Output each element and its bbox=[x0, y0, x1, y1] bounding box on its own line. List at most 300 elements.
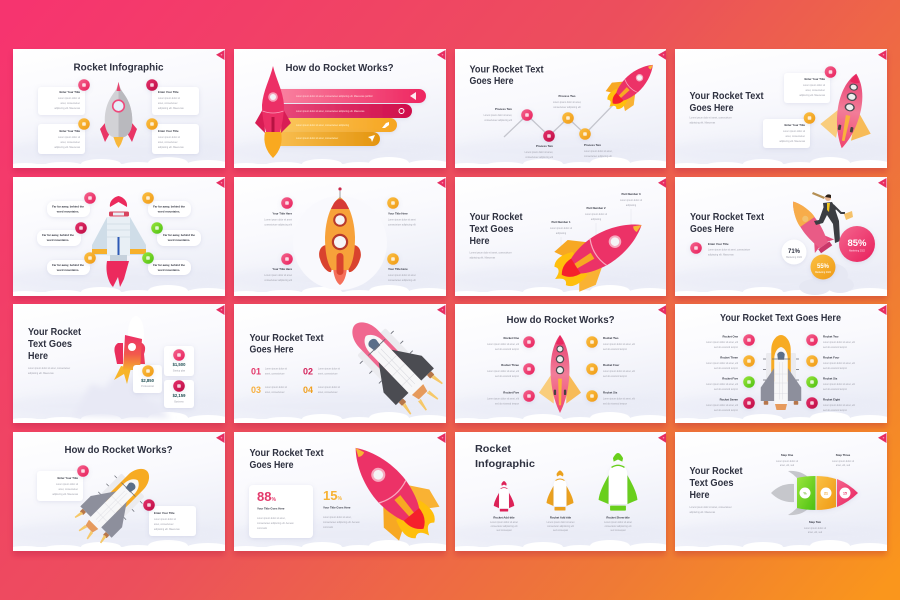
metric card 88 percent: commodo bbox=[257, 528, 268, 530]
pill bottom left: Far far away, behind the bbox=[52, 263, 84, 267]
metric 15 percent: Your Title Goes Here bbox=[323, 506, 351, 510]
text top left: consectetuer adipiscing elit bbox=[264, 224, 292, 226]
pill top right: Far far away, behind the bbox=[153, 204, 185, 208]
title: Here bbox=[470, 235, 490, 247]
body text bbox=[690, 506, 732, 514]
text 1: Lorem ipsum dolor sit amet, bbox=[484, 114, 512, 117]
title bbox=[28, 326, 81, 362]
metric 15 percent bbox=[323, 488, 360, 529]
part 3 label: adipiscing bbox=[626, 205, 637, 207]
panel: How do Rocket Works six labels bbox=[455, 304, 666, 423]
pill bottom right bbox=[148, 260, 191, 275]
value card 2159: $2,159 bbox=[173, 393, 186, 398]
text top left: Your Title Here bbox=[272, 212, 292, 216]
title bbox=[475, 443, 535, 470]
card 2 bbox=[763, 119, 810, 148]
text seven: Lorem ipsum dolor sit amet, elit bbox=[706, 404, 738, 407]
text five bbox=[706, 376, 738, 391]
body text: adipiscing elit. Maecenas bbox=[28, 372, 55, 375]
panel: process line chart with rocket bbox=[455, 49, 666, 168]
shuttle illustration bbox=[92, 196, 146, 287]
text four bbox=[603, 363, 635, 378]
text 1 bbox=[484, 107, 512, 122]
text one: sed do eiusmod tempor bbox=[714, 346, 738, 349]
medium orange rocket bbox=[546, 470, 574, 510]
line chart path bbox=[504, 103, 615, 137]
node 3 bbox=[562, 112, 574, 124]
rocket bbox=[599, 54, 664, 118]
text four: Rocket Four bbox=[823, 356, 840, 360]
value card 2850 bbox=[133, 365, 162, 393]
large green rocket bbox=[599, 453, 637, 511]
body text bbox=[470, 252, 512, 260]
node 1 bbox=[521, 109, 533, 121]
metric card 88 percent: Your Title Goes Here bbox=[257, 506, 285, 510]
panel: shuttle eight labels bbox=[675, 304, 887, 423]
text five bbox=[487, 390, 519, 406]
text 3: Process Two bbox=[558, 94, 576, 98]
icon: left pink bbox=[743, 334, 755, 346]
step one label: Lorem ipsum dolor sit bbox=[776, 460, 798, 463]
bar 4: Lorem ipsum dolor sit amet, consectetuer bbox=[296, 137, 338, 140]
step badge two: 21 bbox=[824, 491, 828, 495]
text one: Rocket One bbox=[722, 334, 738, 338]
item 03: amet, consectetuer bbox=[265, 391, 285, 394]
step three label: amet, elit, sed bbox=[836, 464, 851, 467]
businessman with telescope bbox=[812, 192, 853, 243]
panel: rocket with man and percentages bbox=[675, 177, 887, 296]
card right: amet, consectetuer bbox=[154, 523, 174, 526]
panel: rocket with two cards bbox=[675, 49, 887, 168]
icon: pink badge bbox=[173, 349, 185, 361]
card top left: Enter Your Title bbox=[59, 90, 80, 94]
text one: Lorem ipsum dolor sit amet, elit bbox=[487, 343, 519, 346]
bar 3: Lorem ipsum dolor sit amet, consectetuer adipiscing bbox=[296, 124, 350, 127]
card 2: adipiscing elit. Maecenas bbox=[779, 140, 806, 143]
card top right bbox=[152, 87, 199, 115]
metric card 88 percent: consectetuer adipiscing elit. Aenean bbox=[257, 522, 294, 525]
text two: sed do eiusmod tempor bbox=[603, 348, 627, 351]
pill top left: word mountains. bbox=[56, 210, 79, 214]
icon: left green bbox=[743, 376, 755, 388]
orange segment bbox=[816, 476, 836, 510]
card bottom right: adipiscing elit. Maecenas bbox=[158, 146, 185, 149]
text three: Lorem ipsum dolor sit amet, elit bbox=[706, 362, 738, 365]
text three: Lorem ipsum dolor sit amet, elit bbox=[487, 370, 519, 373]
step badge three: 15 bbox=[843, 491, 847, 495]
card top left: amet, consectetuer bbox=[60, 102, 80, 105]
icon: orange 2 bbox=[586, 336, 598, 348]
card bottom left: Enter Your Title bbox=[59, 129, 80, 133]
title: Your Rocket Text bbox=[250, 332, 324, 344]
text rocket two bbox=[547, 516, 575, 532]
text three: sed do eiusmod tempor bbox=[714, 367, 738, 370]
title: Goes Here bbox=[690, 223, 734, 235]
body text: Lorem ipsum dolor sit amet, consectetuer bbox=[470, 252, 512, 254]
pill bottom right: word mountains. bbox=[157, 268, 180, 272]
step one label: amet, elit, sed bbox=[780, 464, 795, 467]
item 04: amet, consectetuer bbox=[318, 391, 338, 394]
text one: Lorem ipsum dolor sit amet, elit bbox=[706, 341, 738, 344]
pill middle right: Far far away, behind the bbox=[163, 233, 195, 237]
text rocket three: Rocket Show title bbox=[606, 516, 630, 520]
value card 1500: $1,500 bbox=[173, 362, 186, 367]
card left: adipiscing elit. Maecenas bbox=[52, 493, 79, 496]
text two bbox=[823, 334, 855, 349]
item 02 bbox=[303, 366, 340, 376]
title: Here bbox=[28, 350, 48, 362]
pill middle right: word mountains. bbox=[167, 238, 190, 242]
text top right bbox=[388, 212, 416, 226]
text six: Lorem ipsum dolor sit amet, elit bbox=[823, 383, 855, 386]
mountain smoke bbox=[73, 374, 171, 418]
text rocket two: Lorem ipsum dolor sit amet bbox=[547, 521, 575, 524]
panel: horizontal rocket steps bbox=[675, 432, 887, 551]
step badge two bbox=[820, 488, 832, 498]
step three label: Lorem ipsum dolor sit bbox=[832, 460, 854, 463]
text four: Lorem ipsum dolor sit amet, elit bbox=[603, 370, 635, 373]
title: Goes Here bbox=[690, 102, 734, 114]
title: Infographic bbox=[475, 458, 535, 470]
body text: adipiscing elit. Maecenas bbox=[470, 256, 496, 260]
text one bbox=[706, 334, 738, 349]
metric 15 percent: commodo bbox=[323, 527, 334, 529]
step badge three bbox=[840, 488, 850, 498]
text top left bbox=[264, 212, 292, 226]
card 1: amet, consectetuer bbox=[805, 89, 825, 92]
card bottom left: adipiscing elit. Maecenas bbox=[54, 146, 81, 149]
card 2: amet, consectetuer bbox=[785, 135, 805, 138]
icon: right green bbox=[806, 376, 818, 388]
title: Text Goes bbox=[28, 338, 72, 350]
small crimson rocket bbox=[494, 481, 514, 512]
title: Your Rocket bbox=[690, 465, 743, 477]
metric 85 percent: Marketing 2022 bbox=[849, 250, 866, 252]
panel: metrics with large rocket bbox=[234, 432, 446, 551]
icon: orange 4 bbox=[586, 363, 598, 375]
pill middle left: word mountains. bbox=[46, 238, 69, 242]
step one label: Step One bbox=[781, 453, 794, 457]
node 2 bbox=[543, 130, 555, 142]
card bottom left bbox=[38, 124, 85, 154]
text two bbox=[603, 336, 635, 351]
text four: Lorem ipsum dolor sit amet, elit bbox=[823, 362, 855, 365]
text four: sed do eiusmod tempor bbox=[823, 367, 847, 370]
text rocket two: consectetur adipisicing elit bbox=[547, 525, 574, 528]
text rocket two: Rocket Add title bbox=[550, 516, 572, 520]
card top left bbox=[38, 87, 85, 115]
icon: right orange bbox=[806, 355, 818, 367]
icon: orange badge bbox=[804, 112, 815, 124]
step two label: Step Two bbox=[809, 520, 821, 524]
text 3: consectetuer adipiscing elit bbox=[553, 106, 581, 109]
part 3 label: Lorem ipsum dolor sit bbox=[620, 199, 642, 202]
value card 2159 bbox=[164, 380, 194, 408]
title bbox=[470, 211, 523, 247]
text top right: Your Title Here bbox=[388, 212, 408, 216]
text bottom left bbox=[264, 267, 292, 282]
text three: Rocket Three bbox=[501, 363, 519, 367]
icon: orange badge top right bbox=[142, 192, 154, 204]
text rocket one: sed consequat bbox=[497, 529, 512, 532]
card 1: Lorem ipsum dolor sit bbox=[803, 84, 825, 87]
text six: sed do eiusmod tempor bbox=[823, 388, 847, 391]
step one label bbox=[776, 453, 798, 467]
icon: crimson badge bbox=[143, 499, 155, 511]
shuttle bbox=[761, 335, 801, 410]
part 1 label: Lorem ipsum dolor sit bbox=[550, 227, 572, 230]
text two: Lorem ipsum dolor sit amet, elit bbox=[603, 343, 635, 346]
card bottom left: Lorem ipsum dolor sit bbox=[58, 136, 80, 139]
card 2: Enter Your Title bbox=[784, 123, 805, 127]
text top right: Lorem ipsum dolor sit amet bbox=[388, 218, 416, 222]
text five: sed do eiusmod tempor bbox=[714, 388, 738, 391]
value card 2850: Professional bbox=[141, 385, 154, 388]
enter title text bbox=[708, 242, 750, 256]
title: Your Rocket bbox=[28, 326, 81, 338]
step three label bbox=[832, 453, 854, 467]
text one bbox=[487, 336, 519, 351]
text rocket three: sed consequat bbox=[611, 529, 626, 532]
item 02: amet, consectetuer bbox=[318, 372, 338, 376]
card top left: adipiscing elit. Maecenas bbox=[54, 107, 81, 110]
step two label bbox=[804, 520, 826, 534]
text 1: consectetuer adipiscing elit bbox=[484, 119, 512, 122]
value card 1500: Startup plan bbox=[173, 370, 186, 372]
text eight: Rocket Eight bbox=[823, 398, 840, 402]
text rocket one: Rocket Add title bbox=[493, 516, 515, 520]
text four bbox=[823, 356, 855, 370]
item 02: Lorem ipsum dolor sit bbox=[318, 368, 340, 370]
icon: crimson badge bbox=[146, 79, 158, 91]
title: How do Rocket Works? bbox=[286, 62, 394, 74]
text seven bbox=[706, 398, 738, 412]
part 2 label bbox=[585, 206, 607, 221]
pill bottom right: Far far away, behind the bbox=[153, 263, 185, 267]
metric 71 percent: Marketing 2022 bbox=[786, 256, 803, 259]
text 4 bbox=[584, 143, 613, 158]
metric 55 percent: 55% bbox=[817, 264, 830, 270]
title bbox=[250, 332, 324, 356]
step three label: Step Three bbox=[836, 453, 851, 457]
panel: orange rocket four labels bbox=[234, 177, 446, 296]
text two: Lorem ipsum dolor sit amet, elit bbox=[823, 341, 855, 344]
icon: pink badge bbox=[825, 66, 836, 78]
text eight: Lorem ipsum dolor sit amet, elit bbox=[823, 404, 855, 407]
metric 55 percent bbox=[810, 254, 836, 280]
pill middle right bbox=[157, 230, 201, 246]
pill top left: Far far away, behind the bbox=[52, 204, 84, 208]
icon: orange 6 bbox=[586, 390, 598, 402]
text three bbox=[706, 356, 738, 370]
card right: Lorem ipsum dolor sit bbox=[154, 518, 176, 521]
bar 3 bbox=[280, 118, 397, 132]
title: Rocket bbox=[475, 443, 512, 455]
green segment bbox=[797, 476, 816, 510]
text bottom left: Your Title Here bbox=[272, 267, 292, 271]
text bottom right: Your Title Here bbox=[388, 267, 408, 271]
item 04: Lorem ipsum dolor sit bbox=[318, 386, 340, 389]
value card 2850: $2,850 bbox=[141, 378, 155, 383]
part 3 label bbox=[620, 192, 642, 207]
icon: pink 1 bbox=[523, 336, 535, 348]
metric card 88 percent: 88% bbox=[257, 489, 276, 504]
text two: Rocket Two bbox=[823, 334, 839, 338]
text two: Rocket Two bbox=[603, 336, 619, 340]
icon: left crimson bbox=[743, 397, 755, 409]
metric card 88 percent bbox=[249, 485, 313, 538]
item 01: Lorem ipsum dolor sit bbox=[265, 368, 287, 370]
panel: three rockets comparison bbox=[455, 432, 666, 551]
text bottom left: Lorem ipsum dolor sit amet bbox=[264, 274, 292, 277]
card left: Enter Your Title bbox=[57, 476, 78, 480]
text bottom right bbox=[388, 267, 416, 282]
icon: orange badge bottom left bbox=[84, 252, 96, 264]
text top right: consectetuer adipiscing elit bbox=[388, 224, 416, 226]
panel: How do Rocket Works bars bbox=[234, 49, 446, 168]
icon: pink badge top left bbox=[84, 192, 96, 204]
rocket trail bbox=[128, 316, 144, 352]
item 01: 01 bbox=[251, 366, 261, 376]
part 1 label bbox=[550, 220, 572, 235]
text bottom left: consectetuer adipiscing elit bbox=[264, 279, 292, 282]
text eight bbox=[823, 398, 855, 412]
smoke cloud bbox=[799, 263, 854, 295]
text 4: consectetuer adipiscing elit bbox=[584, 155, 612, 158]
icon: dark orange badge bbox=[146, 118, 158, 130]
item 04: 04 bbox=[303, 385, 313, 395]
metric 55 percent: Marketing 2022 bbox=[815, 271, 832, 274]
text three bbox=[487, 363, 519, 378]
text six: Rocket Six bbox=[823, 376, 838, 380]
icon: pink 3 bbox=[523, 363, 535, 375]
card left: Lorem ipsum dolor sit bbox=[56, 483, 78, 486]
card 1: adipiscing elit. Maecenas bbox=[799, 94, 826, 97]
card 1: Enter Your Title bbox=[804, 77, 825, 81]
panel: How do Rocket Works shuttle bbox=[13, 432, 225, 551]
gradient rocket bbox=[114, 335, 145, 384]
body text: adipiscing elit. Maecenas bbox=[690, 122, 716, 124]
pill bottom left bbox=[47, 260, 90, 275]
title: Text Goes bbox=[470, 223, 514, 235]
enter title text: Lorem ipsum dolor sit amet, consectetuer bbox=[708, 248, 750, 252]
bar 1: Lorem ipsum dolor sit amet, consectetuer adipiscing elit. Maecenas porttitor bbox=[296, 95, 373, 98]
card bottom right: Enter Your Title bbox=[158, 129, 179, 133]
metric 15 percent: consectetuer adipiscing elit. Aenean bbox=[323, 521, 360, 524]
icon: left orange bbox=[743, 355, 755, 367]
text six bbox=[823, 376, 855, 391]
pill middle left bbox=[37, 230, 81, 246]
value card 2159: Business bbox=[174, 402, 185, 404]
title: Your Rocket Text bbox=[690, 211, 764, 223]
icon: green badge middle right bbox=[151, 222, 163, 234]
panel: space shuttle six labels bbox=[13, 177, 225, 296]
pill bottom left: word mountains. bbox=[56, 268, 79, 272]
icon: orange badge bottom right bbox=[387, 253, 399, 265]
card top right: Enter Your Title bbox=[158, 90, 179, 94]
body text: adipiscing elit. Maecenas bbox=[690, 511, 716, 514]
item 01: amet, consectetuer bbox=[265, 372, 285, 376]
pale circle bbox=[293, 196, 387, 290]
card 2: Lorem ipsum dolor sit bbox=[783, 130, 805, 133]
part 2 label: adipiscing bbox=[591, 219, 602, 221]
title bbox=[690, 211, 764, 235]
pill top right: word mountains. bbox=[157, 210, 180, 214]
panel: numbered list with shuttle bbox=[234, 304, 446, 423]
icon: pink badge bbox=[78, 79, 90, 91]
title: Here bbox=[690, 489, 710, 501]
pill top left bbox=[47, 201, 90, 217]
icon: green badge bottom right bbox=[142, 252, 154, 264]
body text: Lorem ipsum dolor sit amet, consectetuer bbox=[28, 367, 70, 370]
title: How do Rocket Works? bbox=[64, 444, 172, 456]
icon: orange badge bbox=[78, 118, 90, 130]
part 1 label: adipiscing bbox=[556, 233, 567, 235]
text five: Lorem ipsum dolor sit amet, elit bbox=[487, 398, 519, 400]
title: Goes Here bbox=[470, 75, 514, 87]
text rocket one: Lorem ipsum dolor sit amet bbox=[490, 521, 518, 524]
text 3: Lorem ipsum dolor sit amet, bbox=[553, 101, 582, 104]
text one: sed do eiusmod tempor bbox=[495, 348, 519, 351]
icon: pink badge bbox=[690, 242, 702, 254]
text five: Rocket Five bbox=[503, 390, 519, 394]
icon: pink badge bbox=[77, 465, 89, 477]
enter title text: adipiscing elit. Maecenas bbox=[708, 254, 735, 256]
card left: amet, consectetuer bbox=[58, 488, 78, 491]
text top left: Lorem ipsum dolor sit amet bbox=[264, 218, 292, 222]
bar 4 bbox=[280, 132, 380, 146]
part 1 label: Part Number 1 bbox=[551, 220, 571, 224]
big rocket bbox=[333, 429, 452, 555]
text one: Rocket One bbox=[503, 336, 519, 340]
text rocket one: consectetur adipisicing elit bbox=[491, 525, 518, 528]
card right: adipiscing elit. Maecenas bbox=[154, 528, 181, 531]
text two: sed do eiusmod tempor bbox=[823, 346, 847, 349]
title: Your Rocket Text bbox=[250, 447, 324, 459]
title: Text Goes bbox=[690, 477, 734, 489]
card right: Enter Your Title bbox=[154, 511, 175, 515]
enter title text: Enter Your Title bbox=[708, 242, 729, 246]
card top right: amet, consectetuer bbox=[158, 102, 178, 105]
icon: pink 5 bbox=[523, 390, 535, 402]
pink nose segment bbox=[837, 479, 858, 507]
pill top right bbox=[148, 201, 191, 217]
metric 85 percent: 85% bbox=[847, 238, 867, 249]
card right bbox=[149, 506, 196, 536]
text rocket one bbox=[490, 516, 518, 532]
icon: orange badge top right bbox=[387, 197, 399, 209]
text six: sed do eiusmod tempor bbox=[603, 402, 627, 406]
item 02: 02 bbox=[303, 366, 313, 376]
rocket bbox=[784, 195, 836, 256]
title: Goes Here bbox=[250, 344, 294, 356]
item 03: 03 bbox=[251, 385, 261, 395]
value card 1500 bbox=[164, 346, 194, 376]
card 1 bbox=[784, 73, 830, 103]
text five: Rocket Five bbox=[722, 376, 738, 380]
title bbox=[690, 465, 743, 501]
gray rocket bbox=[100, 82, 137, 148]
part 2 label: Part Number 2 bbox=[586, 206, 606, 210]
card bottom right: Lorem ipsum dolor sit bbox=[158, 136, 180, 139]
body text: Lorem ipsum dolor sit amet, consectetuer bbox=[690, 506, 732, 509]
body text bbox=[690, 116, 732, 124]
icon: right crimson bbox=[806, 397, 818, 409]
title: Your Rocket bbox=[470, 211, 523, 223]
metric 71 percent bbox=[782, 240, 806, 264]
card bottom right bbox=[152, 124, 199, 154]
orange rocket bbox=[319, 187, 361, 285]
